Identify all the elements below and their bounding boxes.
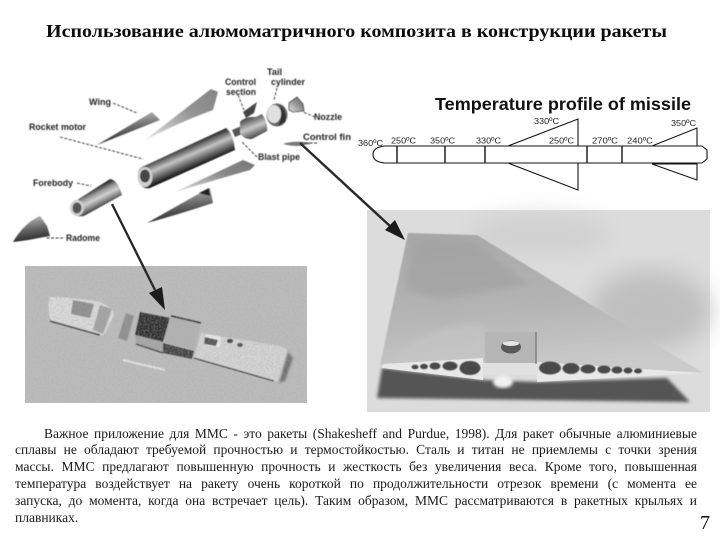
part labels: Radome [66, 233, 100, 243]
part labels: Wing [89, 97, 111, 107]
temperature labels: 330ºC [476, 136, 501, 146]
lightening holes [412, 361, 642, 375]
centre panel [483, 332, 538, 388]
nose section [48, 297, 114, 336]
body paragraph: запуска, до момента, когда она встречает цель). Таким образом, ММС рассматриваются в ракетных крыльях и [15, 493, 697, 508]
body paragraph: плавниках. [15, 510, 78, 525]
leader lines [46, 88, 317, 238]
fin root left [382, 358, 483, 380]
temperature labels: 250ºC [391, 136, 416, 146]
exploded missile diagram [13, 67, 351, 243]
temperature labels: 350ºC [430, 136, 455, 146]
part labels: Control fin [303, 132, 351, 142]
body paragraph: Важное приложение для ММС - это ракеты (Shakesheff and Purdue, 1998). Для ракет обычные алюминиевые [44, 426, 697, 440]
part: upper wing [97, 112, 160, 145]
temperature labels: 360ºC [358, 138, 383, 148]
part: control section [240, 102, 267, 139]
temperature labels: 350ºC [671, 118, 696, 128]
rear tube [194, 333, 293, 383]
part labels [29, 67, 351, 243]
temperature labels: 250ºC [549, 136, 574, 146]
arrow: forebody to photo [112, 204, 165, 310]
part: rocket motor [138, 128, 235, 188]
photo grain [25, 266, 307, 403]
part labels: Control [225, 77, 256, 87]
part labels: Forebody [33, 178, 73, 188]
white strip [123, 360, 165, 370]
part: blast pipe [232, 125, 247, 137]
photo: missile fin [367, 210, 710, 412]
part: top fin [145, 89, 218, 140]
photo: disassembled missile body [25, 266, 307, 403]
part: tail cylinder [266, 104, 288, 126]
missile outline [373, 119, 707, 190]
part labels: Tail [267, 67, 282, 77]
temperature labels: 330ºC [534, 116, 559, 126]
part: forebody [70, 179, 122, 216]
body paragraph: сплавы не обладают требуемой прочностью и термостойкостью. Сталь и титан не приемлемы с точки зрения [15, 442, 697, 457]
body paragraph [15, 426, 697, 525]
part: lower fin two [147, 188, 213, 223]
electronics section [135, 312, 201, 359]
body paragraph: температура воздействует на ракету очень короткой по продолжительности отрезок времени (с момента ее [15, 476, 697, 491]
part labels: Blast pipe [258, 152, 300, 162]
part: lower fin one [175, 160, 255, 192]
temperature profile of missile [358, 94, 707, 190]
fin surface [380, 233, 703, 373]
part: radome [13, 216, 50, 242]
arrow: control fin to fin photo [300, 143, 405, 240]
chart title: Temperature profile of missile [435, 94, 691, 114]
part labels: cylinder [271, 77, 305, 87]
temperature labels: 240ºC [627, 136, 653, 146]
fin root right [537, 362, 703, 382]
part labels: Rocket motor [29, 122, 86, 132]
title: Использование алюмоматричного композита в конструкции ракеты [46, 21, 667, 41]
temperature labels: 270ºC [592, 136, 618, 146]
part labels: section [226, 87, 256, 97]
body paragraph: массы. ММС предлагают повышенную прочность и жесткость без увеличения веса. Кроме того, повышенная [15, 459, 697, 474]
fin shadow [377, 368, 690, 402]
ring section [118, 313, 134, 341]
part: control fin [283, 142, 314, 146]
part labels: Nozzle [314, 112, 342, 122]
part: nozzle [289, 97, 304, 112]
page number: 7 [700, 512, 710, 534]
temperature labels [358, 116, 696, 148]
